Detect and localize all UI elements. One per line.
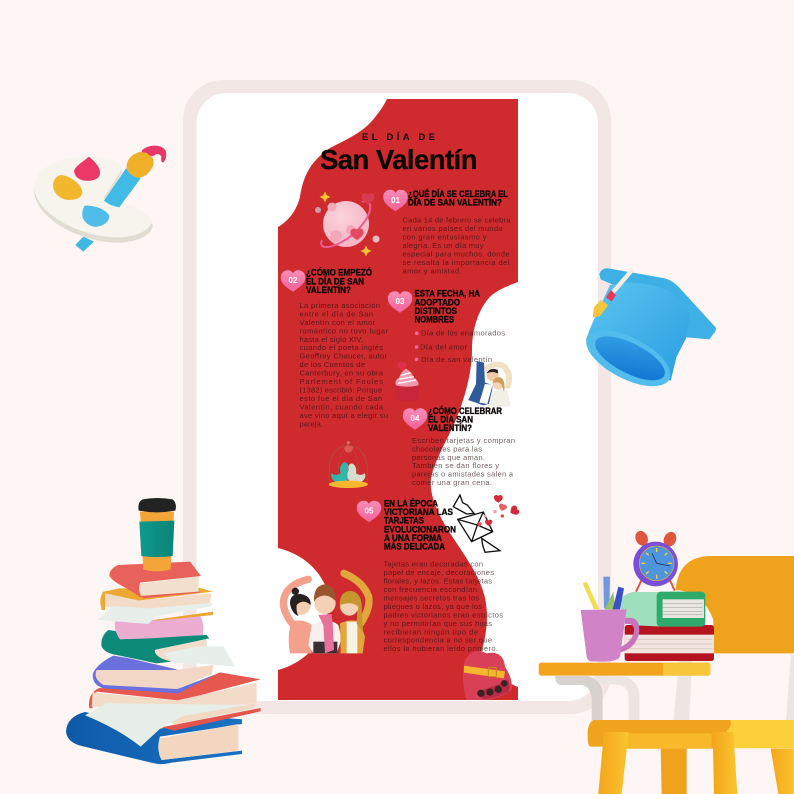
icon: heart 04: 04 <box>410 414 420 423</box>
cap board <box>599 268 716 339</box>
text block 02: ave vino aquí a elegir su <box>300 411 388 420</box>
text block 02: Valentín con el amor <box>300 318 376 327</box>
illustration: desk and chair with books <box>539 529 794 794</box>
text block 02 <box>300 301 388 428</box>
text block 02: Valentín, cuando cada <box>300 402 384 411</box>
icon: heart 05: 05 <box>364 506 374 516</box>
text block 04: También se dan flores y <box>412 461 499 470</box>
heading 05: A UNA FORMA <box>384 533 443 543</box>
chair back <box>676 556 794 653</box>
bullet list: Día del amor <box>420 342 468 352</box>
text block 01: alegría. Es un día muy <box>402 241 484 250</box>
paint blue <box>82 206 109 227</box>
text block 02: (1382) escribió: Porque <box>300 386 382 394</box>
desk top <box>539 663 710 676</box>
text block 01: especial para muchos, donde <box>402 250 510 258</box>
icon: love birds cage <box>329 441 368 488</box>
text block 05: mensajes secretos tras los <box>384 593 479 602</box>
brush handle bottom <box>75 237 94 252</box>
text block 05: y no permitirían que sus hijas <box>384 619 492 628</box>
chair posts <box>555 655 794 720</box>
text block 01: se resalta la importancia del <box>402 258 510 267</box>
text block 02: esto fue el día de San <box>300 394 382 403</box>
text block 02: pareja. <box>300 419 323 428</box>
chair seat <box>588 720 794 749</box>
icon: paint palette and brush <box>34 146 166 252</box>
text block 04: Escriben tarjetas y compran <box>412 436 515 445</box>
text block 05: papel de encaje, decoraciones <box>384 568 494 577</box>
heading 02: VALENTÍN? <box>306 285 351 295</box>
pencils <box>583 577 624 609</box>
bullet list <box>415 329 505 364</box>
illustration: couple <box>468 361 512 407</box>
text block 05: con frecuencia escondían <box>384 585 477 594</box>
section 02 <box>281 267 388 428</box>
cap body <box>586 283 690 381</box>
heading 05: EN LA ÉPOCA <box>384 498 439 508</box>
text block 01: con gran entusiasmo y <box>402 232 487 242</box>
title <box>320 132 478 175</box>
text block 04: parejas o amistades salen a <box>412 470 514 479</box>
heading 05 <box>384 498 456 552</box>
chair legs <box>598 732 794 794</box>
coffee cup <box>138 498 176 571</box>
illustration: three friends making heart <box>283 573 369 653</box>
text block 04: personas que aman. <box>412 453 485 462</box>
book red large <box>89 672 261 731</box>
icon: flying envelope with hearts <box>453 495 520 552</box>
icon: heart 05 <box>357 501 381 522</box>
text block 01: en varios países del mundo <box>402 224 502 233</box>
illustration: stack of books with coffee cup <box>66 498 261 764</box>
panel: red infographic background <box>278 99 518 700</box>
section 05 <box>357 498 503 653</box>
text block 02: cuando el poeta inglés <box>300 343 383 352</box>
text block 02: La primera asociación <box>300 301 380 310</box>
mug <box>581 609 639 662</box>
clock <box>633 529 679 592</box>
text block 05 <box>384 560 503 653</box>
text block 05: padres victorianos eran estrictos <box>384 610 503 619</box>
text block 04 <box>412 436 515 487</box>
heading 01: ¿QUÉ DÍA SE CELEBRA EL <box>408 189 509 199</box>
palette <box>34 157 153 243</box>
text block 04: chocolates para las <box>412 444 482 453</box>
heading 04: ¿CÓMO CELEBRAR <box>428 405 503 416</box>
heading 02: EL DÍA DE SAN <box>306 276 364 286</box>
text block 05: ellos la hubieran leído primero. <box>384 644 498 653</box>
heading 01 <box>408 189 509 208</box>
friend left <box>283 579 312 653</box>
paint red <box>74 157 100 181</box>
heading 03: ESTA FECHA, HA <box>414 289 481 299</box>
book red top <box>109 562 201 598</box>
book blue <box>66 712 242 764</box>
icon: heart 03: 03 <box>396 297 405 306</box>
text block 02: Canterbury, en su obra <box>300 369 384 378</box>
book pink <box>115 615 203 639</box>
icon: graduation cap <box>578 268 716 398</box>
text block 02: de los Cuentos de <box>300 360 365 369</box>
heading 05: EVOLUCIONARON <box>384 524 456 534</box>
text block 02: Geoffrey Chaucer, autor <box>300 352 388 361</box>
icon: heart 02: 02 <box>288 276 298 285</box>
text block 05: Tajetas eran decoradas con <box>384 560 483 568</box>
book green <box>101 630 235 667</box>
brush <box>104 168 141 207</box>
friend middle <box>308 584 342 653</box>
heading 02 <box>306 267 372 295</box>
heading 03: DISTINTOS <box>414 306 457 316</box>
book orange <box>97 587 213 624</box>
heading 05: VICTORIANA LAS <box>384 507 453 517</box>
book green <box>621 592 705 627</box>
icon: cupcake <box>393 362 421 401</box>
icon: heart 02 <box>281 270 305 292</box>
friend right <box>340 573 369 653</box>
book red <box>625 625 714 661</box>
heading 04: VALENTÍN? <box>428 423 472 433</box>
text block 02: romántico no tuvo lugar <box>300 326 388 335</box>
heading 02: ¿CÓMO EMPEZÓ <box>306 267 372 278</box>
heading 01: DÍA DE SAN VALENTÍN? <box>408 198 502 208</box>
bullet list: Día de san valentín <box>421 355 492 364</box>
heading 03: NOMBRES <box>414 315 454 325</box>
title kicker: EL DÍA DE <box>362 132 435 143</box>
tassel <box>593 269 633 318</box>
text block 01 <box>402 216 511 276</box>
bullet list: Día de los enamorados <box>421 329 505 338</box>
icon: heart 01: 01 <box>391 196 400 205</box>
heading 05: TARJETAS <box>384 516 424 526</box>
icon: planet with heart ring <box>315 192 380 256</box>
paper sheet <box>85 703 247 747</box>
text block 05: correspondencia a no ser que <box>384 636 492 645</box>
text block 02: Parlement of Foules <box>300 377 383 386</box>
text block 02: hasta el siglo XIV, <box>300 335 363 344</box>
heading 05: MÁS DELICADA <box>384 542 446 552</box>
section 01 <box>383 189 511 276</box>
text block 02: entre el día de San <box>300 309 373 318</box>
section 03 <box>388 289 505 364</box>
title main: San Valentín <box>320 144 478 175</box>
cap opening <box>578 319 679 398</box>
text block 01: amor y amistad. <box>402 266 462 276</box>
tablet frame <box>183 80 611 714</box>
text block 05: recibieran ningún tipo de <box>384 627 478 636</box>
heading 04 <box>428 405 503 433</box>
section 04 <box>403 405 515 487</box>
heading 04: EL DÍA SAN <box>428 414 473 424</box>
text block 04: comer una gran cena. <box>412 478 492 487</box>
heading 03 <box>414 289 481 325</box>
text block 05: pliegues o lazos, ya que los <box>384 602 482 611</box>
text block 05: florales, y lazos. Estas tarjetas <box>384 576 492 585</box>
book periwinkle <box>93 656 216 693</box>
paint yellow <box>53 175 82 200</box>
text block 01: Cada 14 de febrero se celebra <box>402 216 511 224</box>
icon: heart chocolate box <box>463 651 512 700</box>
heading 03: ADOPTADO <box>414 297 460 307</box>
